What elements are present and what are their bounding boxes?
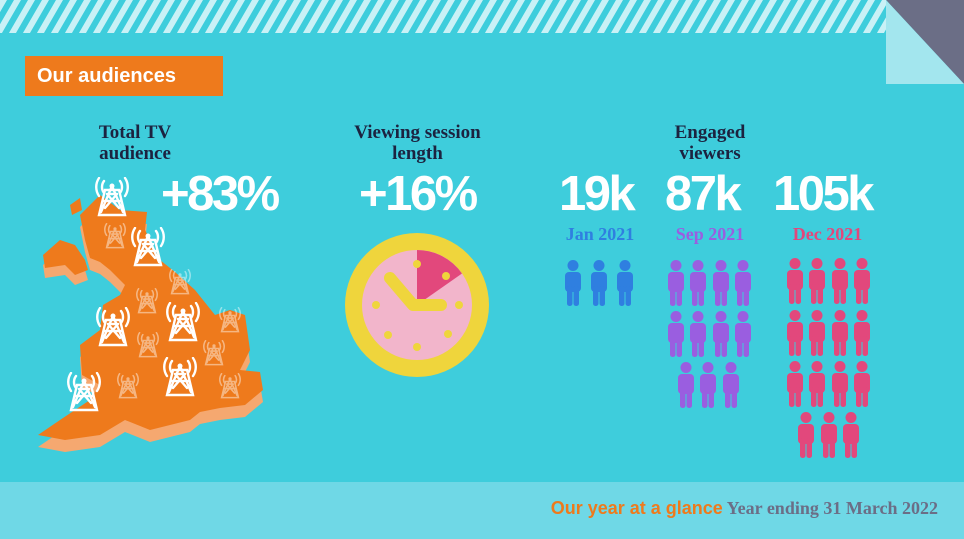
- title: Our audiences: [25, 56, 223, 96]
- stat: +16%: +16%: [359, 167, 476, 221]
- map: UK with transmitters: [38, 177, 263, 452]
- heading: Total TV audience: Total TV: [99, 122, 171, 143]
- footer band: [0, 482, 964, 539]
- title: Our audiences: Our audiences: [37, 65, 176, 87]
- heading: Engaged viewers: viewers: [679, 143, 741, 164]
- stat: 87k Sep 2021: [665, 167, 751, 408]
- stat: 19k Jan 2021: Jan 2021: [566, 224, 634, 244]
- heading: Engaged viewers: [674, 122, 746, 164]
- stat: 19k Jan 2021: [559, 167, 636, 306]
- heading: Viewing session length: Viewing session: [354, 122, 481, 143]
- page fold corner: [886, 0, 964, 84]
- stat: 105k Dec 2021: 105k: [773, 167, 872, 221]
- stat: +83%: +83%: [161, 167, 278, 221]
- heading: Total TV audience: audience: [99, 143, 171, 164]
- stat: 87k Sep 2021: Sep 2021: [676, 224, 744, 244]
- heading: Viewing session length: length: [392, 143, 443, 164]
- stat: 87k Sep 2021: 87k: [665, 167, 739, 221]
- heading: Total TV audience: [99, 122, 171, 164]
- decorative stripes top: [0, 0, 886, 33]
- heading: Viewing session length: [354, 122, 481, 164]
- stat: 105k Dec 2021: [773, 167, 874, 458]
- stat: 105k Dec 2021: Dec 2021: [793, 224, 862, 244]
- footer text: Our year at a glance Year ending 31 March 2022: [551, 498, 938, 518]
- stat: 19k Jan 2021: 19k: [559, 167, 633, 221]
- heading: Engaged viewers: Engaged: [675, 122, 745, 143]
- icon: clock: [345, 233, 489, 377]
